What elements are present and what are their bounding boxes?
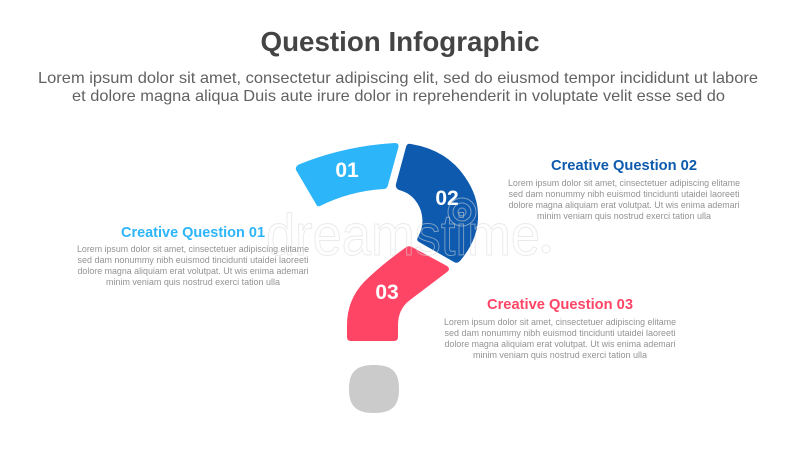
segment 02: 02 — [435, 187, 459, 210]
subtitle — [38, 70, 758, 105]
question mark dot — [349, 365, 399, 413]
text block: question 03: Creative Question 03 — [487, 296, 633, 313]
text block: question 01: dolore magna aliquiam erat volutpat. Ut wis enima ademari — [78, 266, 308, 277]
text block: question 01: sed dam nonummy nibh euismod tincidunti utaidei laoreeti — [78, 255, 308, 266]
text block: question 01: Lorem ipsum dolor sit amet, cinsectetuer adipiscing elitame — [77, 244, 309, 255]
subtitle: Lorem ipsum dolor sit amet, consectetur adipiscing elit, sed do eiusmod tempor incididunt ut labore — [38, 70, 758, 87]
segment 03: 03 — [375, 281, 399, 304]
text block: question 03: sed dam nonummy nibh euismod tincidunti utaidei laoreeti — [444, 328, 676, 339]
watermark: dreamstime — [266, 203, 540, 268]
segment 02 — [396, 144, 478, 263]
text block: question 03 — [444, 296, 676, 361]
text block: question 01: minim veniam quis nostrud exerci tation ulla — [106, 277, 281, 288]
text block: question 02: Lorem ipsum dolor sit amet, cinsectetuer adipiscing elitame — [508, 178, 740, 189]
text block: question 02: Creative Question 02 — [551, 157, 697, 174]
text block: question 03: dolore magna aliquiam erat volutpat. Ut wis enima ademari — [444, 339, 676, 350]
text block: question 01 — [77, 224, 309, 288]
text block: question 03: minim veniam quis nostrud exerci tation ulla — [473, 350, 648, 361]
text block: question 01: Creative Question 01 — [121, 224, 265, 241]
text block: question 03: Lorem ipsum dolor sit amet, cinsectetuer adipiscing elitame — [444, 317, 676, 328]
text block: question 02 — [508, 157, 740, 222]
title: Question Infographic — [260, 26, 540, 57]
text block: question 02: sed dam nonummy nibh euismod tincidunti utaidei laoreeti — [508, 189, 740, 200]
subtitle: et dolore magna aliqua Duis aute irure dolor in reprehenderit in voluptate velit esse sed do — [72, 88, 725, 105]
segment 03 — [347, 246, 449, 341]
text block: question 02: dolore magna aliquiam erat volutpat. Ut wis enima ademari — [508, 200, 740, 211]
segment 01 — [296, 143, 399, 206]
segment 01: 01 — [335, 159, 359, 182]
text block: question 02: minim veniam quis nostrud exerci tation ulla — [537, 211, 712, 222]
